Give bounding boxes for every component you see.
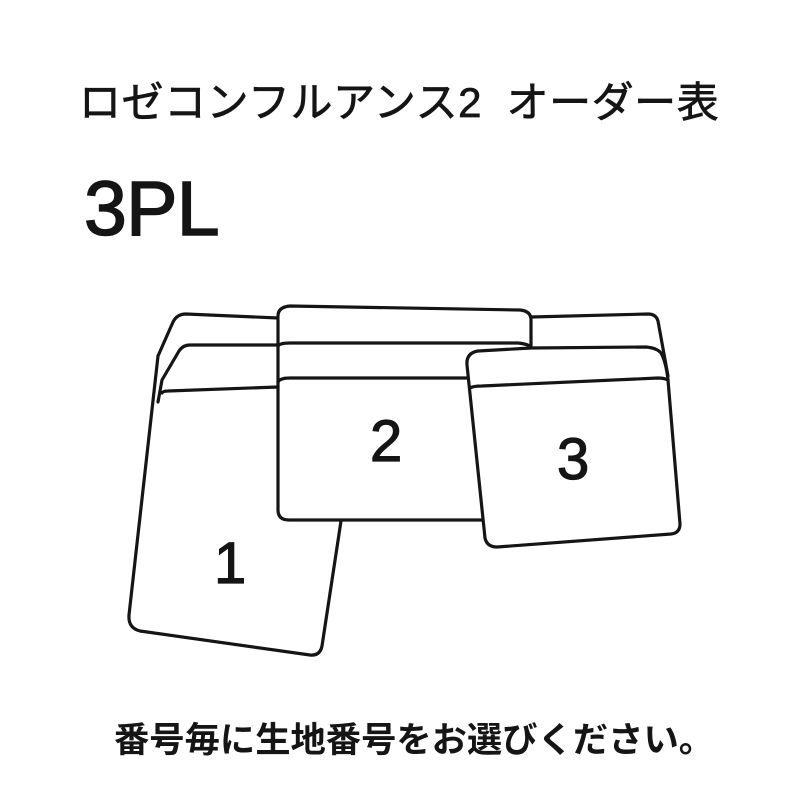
seat number 1: 1 — [214, 531, 246, 596]
seat 3 — [467, 347, 680, 547]
seat number 3: 3 — [557, 427, 589, 492]
seat number 2: 2 — [370, 409, 402, 474]
title: ロゼコンフルアンス2 オーダー表 — [79, 79, 719, 126]
left back cushion — [158, 314, 278, 402]
seat 2 with back cushion — [278, 306, 531, 520]
model code heading: 3PL — [84, 166, 219, 252]
right back cushion — [531, 314, 668, 376]
seat 1 — [129, 356, 341, 655]
instruction text: 番号毎に生地番号をお選びください。 — [114, 721, 714, 760]
